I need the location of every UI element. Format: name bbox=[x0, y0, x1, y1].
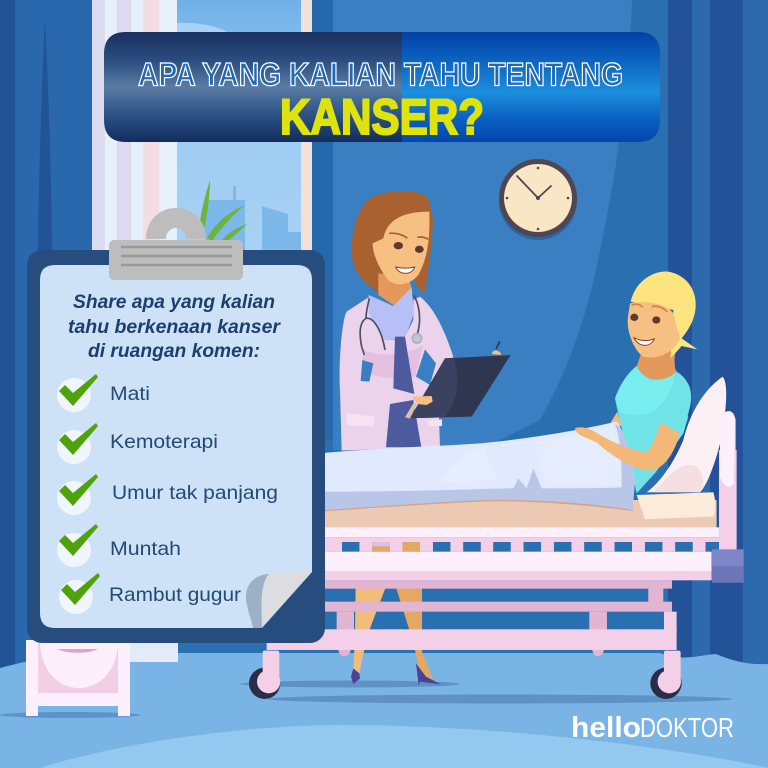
checklist item: Umur tak panjang bbox=[57, 474, 278, 515]
clipboard panel bbox=[27, 208, 325, 643]
coat pockets bbox=[347, 413, 442, 427]
head post bbox=[719, 450, 737, 550]
checklist item: Kemoterapi: Kemoterapi bbox=[110, 431, 218, 453]
intro text: Share apa yang kalian bbox=[73, 291, 275, 313]
hospital bed bbox=[247, 450, 744, 699]
patient eyes and smile bbox=[630, 304, 667, 345]
cushion bbox=[637, 492, 715, 519]
bedside table bbox=[26, 640, 178, 716]
window with view bbox=[92, 0, 333, 440]
patient shirt bbox=[615, 366, 691, 493]
clipboard held by doctor bbox=[405, 341, 511, 419]
left caster bbox=[249, 651, 280, 699]
clipboard paper bbox=[40, 265, 312, 628]
doctor hand bbox=[412, 396, 433, 405]
patient arm over blanket bbox=[575, 410, 688, 470]
checklist item: Mati bbox=[57, 374, 150, 412]
plant behind clipboard bbox=[199, 180, 247, 242]
doctor arm gaps bbox=[361, 349, 436, 385]
bed side handle bbox=[712, 549, 744, 583]
blanket bbox=[320, 422, 635, 512]
hello doktor logo: hello bbox=[571, 712, 641, 744]
patient face bbox=[628, 302, 680, 357]
hello doktor logo: DOKTOR bbox=[640, 712, 734, 743]
title banner bbox=[104, 32, 660, 145]
checklist item: Mati: Mati bbox=[110, 383, 150, 405]
upper white rail bbox=[247, 527, 719, 537]
right curtains bbox=[668, 0, 768, 670]
checklist item: Kemoterapi bbox=[57, 423, 218, 464]
checklist item: Muntah bbox=[57, 524, 181, 567]
folded paper corner bbox=[246, 572, 311, 628]
left curtain bbox=[0, 0, 92, 670]
patient far arm bbox=[611, 412, 622, 427]
stethoscope bbox=[360, 295, 422, 355]
mattress bbox=[247, 500, 717, 528]
title line two: KANSER? bbox=[280, 89, 484, 145]
clipboard clip bbox=[109, 208, 243, 280]
intro text bbox=[68, 291, 281, 362]
intro text: di ruangan komen: bbox=[88, 340, 260, 362]
hello doktor logo bbox=[571, 712, 734, 744]
clipboard board bbox=[27, 250, 325, 643]
checklist item: Rambut gugur: Rambut gugur bbox=[109, 584, 242, 606]
right caster bbox=[650, 651, 682, 699]
title line one: APA YANG KALIAN TAHU TENTANG bbox=[138, 56, 623, 92]
head frame top bbox=[720, 411, 736, 527]
doctor legs bbox=[351, 587, 441, 685]
patient neck bbox=[637, 337, 680, 380]
patient bbox=[611, 272, 736, 527]
banner background bbox=[104, 32, 660, 142]
lower white rail bbox=[247, 552, 712, 572]
doctor bbox=[340, 191, 511, 451]
intro text: tahu berkenaan kanser bbox=[68, 316, 281, 338]
checklist item: Muntah: Muntah bbox=[110, 538, 181, 560]
frame supports bbox=[648, 588, 663, 602]
doctor shirt collar bbox=[369, 287, 414, 341]
wall clock bbox=[499, 159, 577, 240]
doctor hair bbox=[351, 191, 433, 293]
pillow bbox=[647, 377, 726, 492]
pink rail band with holes bbox=[247, 537, 719, 552]
checklist item: Umur tak panjang: Umur tak panjang bbox=[112, 482, 278, 504]
checklist item: Rambut gugur bbox=[59, 573, 242, 614]
doctor coat bbox=[340, 297, 453, 451]
doctor face bbox=[373, 212, 429, 284]
doctor eyes and smile bbox=[389, 233, 428, 273]
doctor dress bbox=[386, 337, 421, 447]
patient scarf bbox=[631, 272, 697, 358]
doctor neck bbox=[378, 273, 412, 308]
floor bbox=[0, 653, 768, 768]
